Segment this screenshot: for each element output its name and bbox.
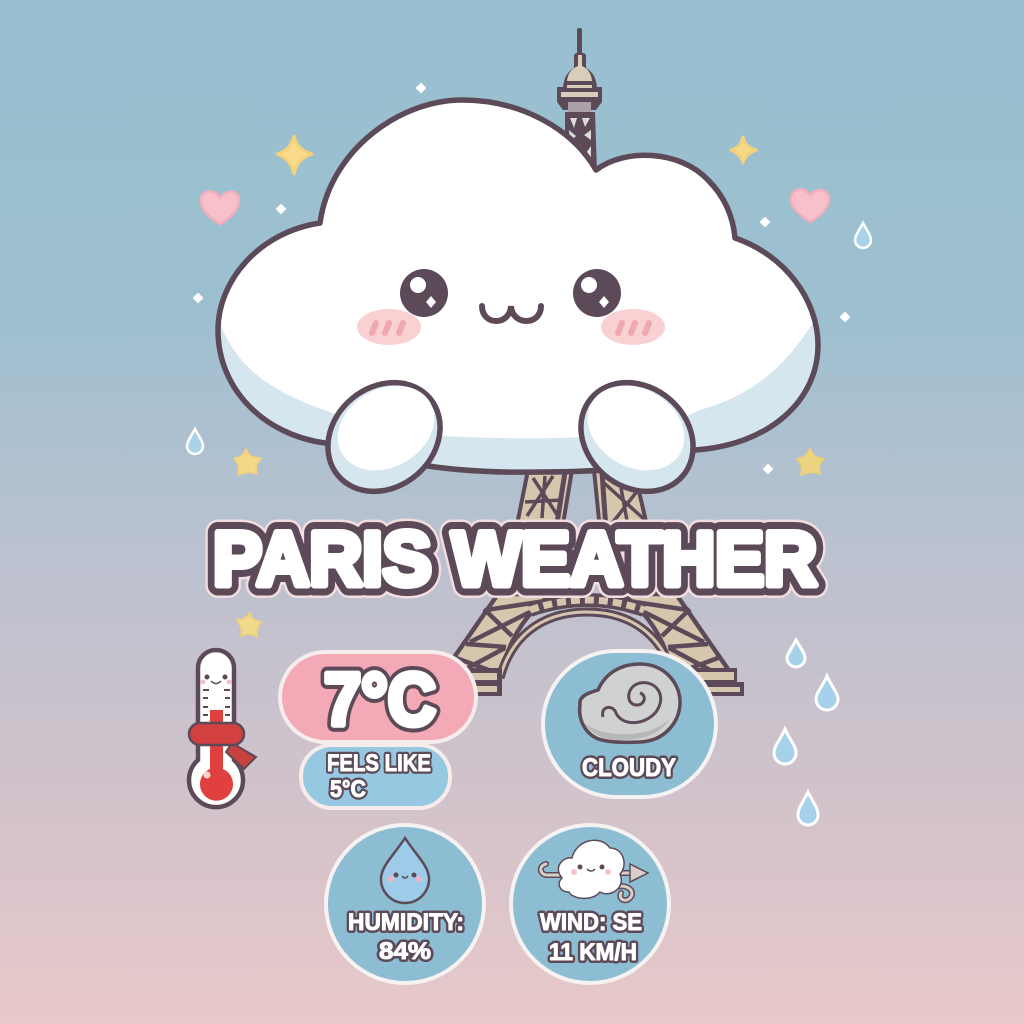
- tower right upper leg: [594, 470, 648, 530]
- condition label: CLOUDY: [582, 754, 676, 782]
- feels like text: [327, 750, 431, 803]
- panel: humidity: [326, 825, 484, 983]
- title: PARIS WEATHER: [213, 517, 817, 602]
- feels like text: 5°C: [330, 776, 366, 803]
- icon: star top right: [731, 137, 756, 163]
- humidity label: HUMIDITY:: [348, 909, 464, 936]
- right blush: [601, 309, 665, 345]
- icon: star right lower: [797, 449, 824, 475]
- icon: heart right: [791, 189, 829, 222]
- cloud outline: [218, 100, 818, 472]
- cloud character: [215, 100, 822, 514]
- tower arch: [500, 612, 674, 678]
- wind label: WIND: SE: [540, 909, 642, 936]
- panel: temperature: [280, 652, 476, 742]
- tower right foot: [672, 668, 744, 696]
- feels like text: 5°C: [330, 776, 366, 803]
- icon: wind cloud: [541, 840, 648, 900]
- cloud bottom shading: [220, 324, 816, 470]
- icon: star under title: [237, 613, 261, 637]
- icon: gray swirl cloud: [580, 664, 680, 742]
- panel: cloudy: [543, 651, 716, 797]
- icon: raindrop 1: [787, 640, 805, 667]
- decorations: [187, 84, 871, 825]
- wind label: WIND: SE: [540, 909, 642, 936]
- icon: raindrop top right: [855, 223, 871, 248]
- panel: wind: [511, 825, 669, 983]
- condition label: CLOUDY: [582, 754, 676, 782]
- wind label: [540, 909, 642, 966]
- tower center span: [530, 600, 644, 610]
- cloud body: [218, 100, 818, 472]
- icon: raindrop left: [187, 429, 203, 454]
- temperature value: 7°C: [324, 658, 436, 741]
- right arm: [559, 360, 715, 514]
- icon: star left lower: [234, 449, 261, 475]
- tower left foot: [440, 668, 502, 696]
- icon: raindrop 2: [816, 676, 838, 710]
- tower left lower leg: [444, 594, 552, 672]
- feels like text: FELS LIKE: [327, 750, 431, 777]
- panel: feels like: [301, 745, 450, 808]
- sparkles: [194, 84, 849, 473]
- tower right lower leg: [622, 594, 730, 672]
- wind label: 11 KM/H: [549, 939, 637, 966]
- humidity label: [348, 909, 464, 965]
- icon: water drop: [381, 838, 429, 903]
- icon: heart left: [201, 191, 239, 224]
- tower top: [557, 28, 602, 172]
- left eye: [400, 269, 448, 317]
- title: PARIS WEATHER: [213, 517, 817, 602]
- icon: raindrop 4: [798, 792, 818, 825]
- tower left upper leg: [516, 470, 572, 530]
- humidity label: HUMIDITY:: [348, 909, 464, 936]
- icon: thermometer with scarf: [189, 650, 256, 807]
- icon: raindrop 3: [774, 729, 796, 764]
- left blush: [357, 309, 421, 345]
- icon: star top left: [277, 136, 312, 174]
- humidity label: 84%: [379, 938, 431, 965]
- feels like text: FELS LIKE: [327, 750, 431, 777]
- left arm: [306, 360, 462, 514]
- temperature value: 7°C: [324, 658, 436, 741]
- right eye: [573, 269, 621, 317]
- title: PARIS WEATHER: [213, 517, 817, 602]
- wind label: 11 KM/H: [549, 939, 637, 966]
- humidity label: 84%: [379, 938, 431, 965]
- mouth: [482, 306, 541, 321]
- eiffel tower: [440, 28, 744, 696]
